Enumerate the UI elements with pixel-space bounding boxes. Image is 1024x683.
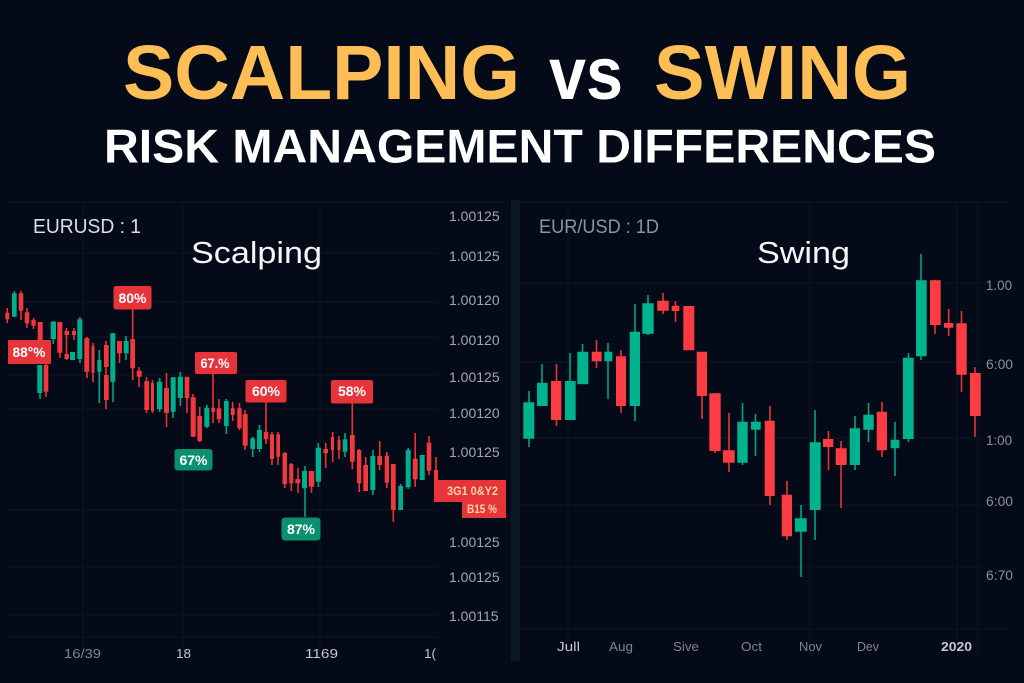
price axis: swing: 1.00 bbox=[986, 277, 1012, 293]
time axis: swing: Sive bbox=[673, 639, 699, 654]
title: scalping vs swing: SWING bbox=[654, 30, 911, 116]
title: scalping vs swing: SCALPING bbox=[123, 30, 520, 116]
callout: 80% bbox=[114, 286, 152, 310]
price axis: swing: 6:00 bbox=[986, 356, 1013, 372]
time axis: scalping: 1( bbox=[424, 646, 437, 661]
callout: overlapping price tags bbox=[434, 480, 506, 518]
callout: green 67% bbox=[174, 449, 212, 470]
title: scalping vs swing: vs bbox=[549, 32, 623, 115]
subtitle: RISK MANAGEMENT DIFFERENCES bbox=[104, 120, 936, 172]
callout: green 87% bbox=[282, 518, 320, 540]
callout: 60% bbox=[246, 380, 286, 402]
price axis: scalping: 1.00120 bbox=[449, 405, 500, 421]
price axis: scalping: 1.00125 bbox=[449, 248, 500, 264]
time axis: scalping: 1169 bbox=[305, 646, 338, 661]
callout: 88%: 88°% bbox=[12, 344, 46, 360]
price axis: scalping: 1.00120 bbox=[449, 292, 500, 308]
panel heading: Scalping: Scalping bbox=[191, 235, 322, 270]
price axis: scalping: 1.00125 bbox=[449, 444, 500, 460]
price axis: scalping: 1.00125 bbox=[449, 534, 500, 550]
panel label: EUR/USD: EUR/USD : 1D bbox=[539, 217, 659, 238]
callout: 80%: 80% bbox=[118, 290, 147, 306]
callout: overlapping price tags: B15 % bbox=[467, 502, 497, 516]
panel label: EURUSD: EURUSD : 1 bbox=[33, 216, 141, 238]
callout: 58%: 58% bbox=[338, 383, 367, 399]
callout: green 67%: 67% bbox=[179, 452, 208, 468]
callout: overlapping price tags: 3G1 0&Y2 bbox=[447, 484, 498, 498]
callout: 60%: 60% bbox=[252, 383, 281, 399]
price axis: swing: 1:00 bbox=[986, 432, 1012, 448]
panel divider bbox=[511, 200, 520, 661]
time axis: swing: Nov bbox=[799, 639, 822, 654]
price axis: swing bbox=[986, 277, 1013, 583]
callout: 58% bbox=[331, 380, 373, 404]
time axis: scalping: 18 bbox=[176, 646, 191, 661]
price axis: scalping bbox=[449, 208, 500, 624]
callout: 67.%: 67.% bbox=[200, 355, 230, 371]
price axis: scalping: 1.00125 bbox=[449, 208, 500, 224]
price axis: scalping: 1.00125 bbox=[449, 569, 500, 585]
price axis: swing: 6:00 bbox=[986, 493, 1013, 509]
callout: 67.% bbox=[195, 352, 237, 374]
price axis: scalping: 1.00120 bbox=[449, 332, 500, 348]
time axis: swing: Jull bbox=[557, 639, 580, 654]
time axis: scalping: 16/39 bbox=[64, 646, 101, 661]
time axis: swing: Aug bbox=[609, 639, 633, 654]
panel: swing chart bbox=[520, 202, 1013, 660]
candlesticks: swing bbox=[523, 254, 981, 577]
price axis: swing: 6:70 bbox=[986, 567, 1013, 583]
time axis: scalping bbox=[64, 646, 437, 661]
time axis: swing: 2020 bbox=[941, 639, 972, 654]
panel heading: Swing: Swing bbox=[757, 235, 850, 270]
candlesticks: scalping bbox=[5, 291, 438, 522]
time axis: swing: Oct bbox=[741, 639, 762, 654]
callout: green 87%: 87% bbox=[287, 521, 316, 537]
price axis: scalping: 1.00115 bbox=[449, 608, 499, 624]
time axis: swing: Dev bbox=[857, 639, 879, 654]
title: scalping vs swing bbox=[123, 30, 911, 116]
price axis: scalping: 1.00125 bbox=[449, 369, 500, 385]
time axis: swing bbox=[557, 639, 972, 654]
callout: 88% bbox=[8, 340, 51, 364]
panel: scalping chart bbox=[5, 202, 506, 661]
